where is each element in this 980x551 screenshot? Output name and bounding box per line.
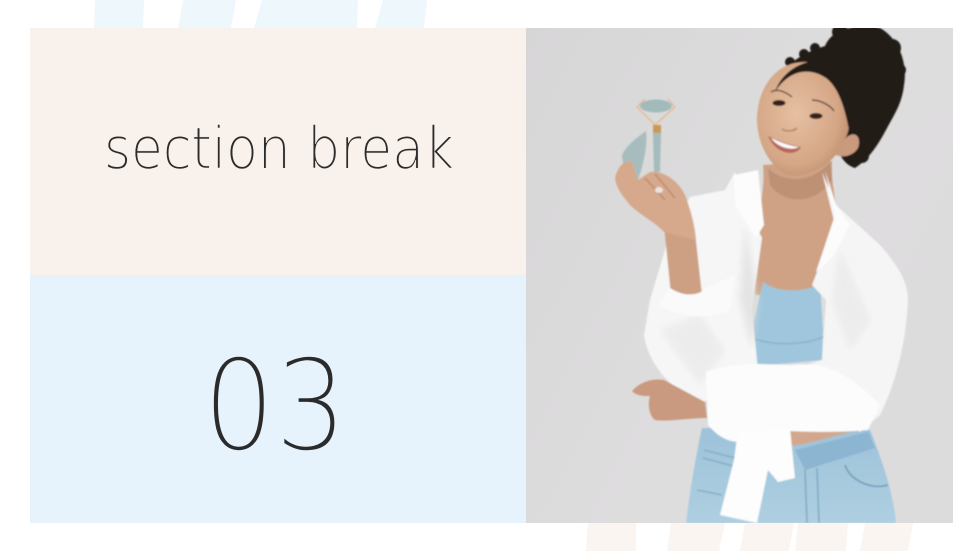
- jeans: [686, 428, 896, 523]
- mouth: [768, 136, 801, 153]
- shirt shading folds: [670, 244, 860, 375]
- facial roller: [622, 99, 675, 185]
- face: [757, 62, 850, 176]
- heading: section break: section break: [104, 116, 454, 182]
- eyes and brows: [771, 90, 834, 111]
- raised hand: [615, 161, 696, 240]
- neck and chest: [752, 160, 838, 295]
- decorative stripes: top blue: [94, 0, 427, 28]
- folded forearm sleeve: [706, 364, 880, 442]
- raised arm: [664, 232, 702, 296]
- shirt knot tail: [720, 428, 795, 523]
- number: 03: 03: [203, 332, 347, 479]
- shirt collars: [734, 170, 764, 238]
- blue top: [753, 282, 823, 366]
- shirt left side: [644, 172, 762, 402]
- midriff: [790, 430, 852, 446]
- shirt right side: [810, 172, 908, 432]
- panel: section number: [30, 275, 526, 523]
- nose shadow: [782, 128, 797, 131]
- lower left hand: [632, 379, 707, 421]
- icon: curly hair: [775, 21, 906, 168]
- photo: woman holding a facial roller: [526, 21, 953, 523]
- hair front: [775, 61, 852, 135]
- ear: [836, 134, 859, 156]
- decorative stripes: bottom beige: [586, 523, 913, 551]
- panel: section title: [30, 28, 526, 275]
